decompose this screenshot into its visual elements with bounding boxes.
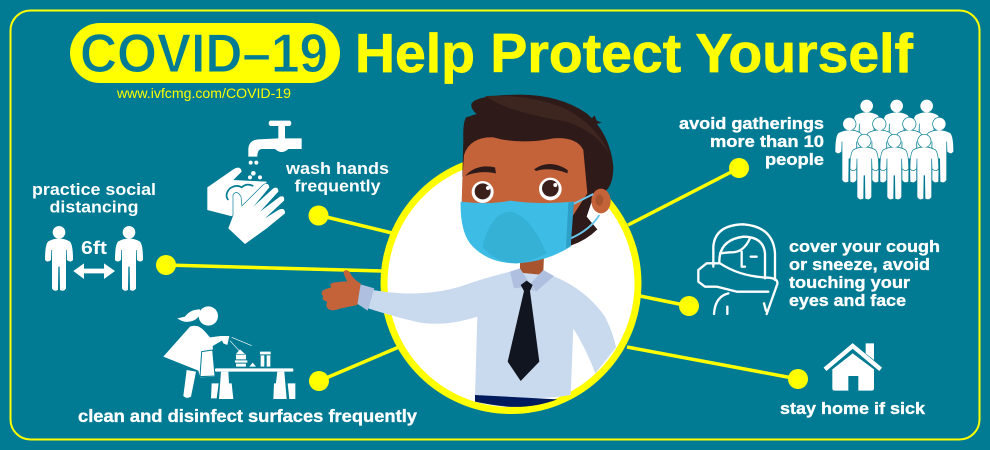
mask: [461, 201, 573, 263]
man with mask: [321, 95, 616, 407]
covid badge: [70, 23, 340, 83]
connector dots: [156, 158, 808, 391]
soap foam outline: [227, 185, 253, 200]
cup: [260, 352, 271, 367]
cover cough label: eyes and face: [789, 291, 906, 310]
faucet: [248, 121, 302, 157]
panel: clean surfaces: [78, 306, 417, 426]
wash hands label: frequently: [294, 178, 381, 196]
panel: avoid gatherings: [679, 100, 953, 199]
back hand: [207, 168, 267, 217]
spray lines: [230, 337, 252, 352]
cover cough label: touching your: [789, 273, 910, 292]
leg: [183, 370, 196, 398]
heading: Help Protect Yourself: [355, 22, 914, 84]
wash hands label: wash hands: [285, 160, 389, 178]
belt: [475, 395, 557, 407]
tie: [508, 281, 539, 381]
panel: social distancing: [32, 181, 156, 291]
apron: [200, 350, 215, 377]
distance label: 6ft: [81, 237, 107, 258]
mask straps: [571, 194, 599, 238]
table legs: [219, 372, 287, 399]
social distancing label: distancing: [50, 198, 138, 216]
cover cough label: [789, 237, 940, 310]
stools: [211, 383, 295, 399]
icon: person coughing into elbow: [698, 224, 777, 314]
mask side strip: [566, 202, 574, 248]
social distancing label: [32, 181, 156, 216]
icon: house: [825, 343, 881, 391]
website url: www.ivfcmg.com/COVID-19: [116, 86, 291, 101]
icon: faucet and hands: [207, 121, 302, 244]
central circle: [384, 156, 638, 410]
icon: woman disinfecting table: [163, 306, 295, 399]
avoid gatherings label: [679, 114, 824, 169]
mask nose panel: [483, 212, 547, 263]
ponytail: [177, 309, 201, 322]
covid label: COVID–19: [80, 22, 328, 84]
avoid gatherings label: more than 10: [710, 132, 824, 151]
water drops: [248, 161, 262, 179]
neck: [520, 257, 544, 281]
collar: [510, 268, 554, 292]
title: [70, 22, 914, 84]
stacked dishes: [235, 349, 247, 367]
icon: crowd of people: [835, 100, 953, 199]
spray bottle: [220, 336, 229, 345]
eyes: [472, 178, 562, 203]
connector lines: [166, 168, 798, 381]
hand: [321, 270, 361, 310]
hair highlight: [485, 96, 611, 156]
avoid gatherings label: people: [765, 150, 824, 169]
panel: stay home: [780, 343, 926, 418]
stay home label: stay home if sick: [780, 399, 926, 418]
social distancing label: practice social: [32, 181, 156, 199]
panel: cover cough: [698, 224, 940, 314]
small cone: [249, 363, 256, 367]
head: [199, 306, 218, 326]
dress: [163, 326, 222, 377]
panel: wash hands: [207, 121, 389, 244]
front hand: [228, 184, 285, 244]
wash hands label: [285, 160, 389, 196]
hair tuft: [592, 115, 602, 124]
eyebrows: [465, 164, 568, 176]
shirt cuff: [357, 284, 374, 311]
clean surfaces label: clean and disinfect surfaces frequently: [78, 406, 417, 426]
cover cough label: or sneeze, avoid: [789, 255, 930, 274]
table top: [215, 368, 293, 372]
ear: [591, 189, 611, 213]
cover cough label: cover your cough: [789, 237, 940, 256]
face: [462, 137, 587, 230]
avoid gatherings label: avoid gatherings: [679, 114, 824, 133]
icon: two people six feet apart: [45, 226, 143, 291]
shirt: [368, 272, 616, 398]
hair: [462, 95, 613, 246]
